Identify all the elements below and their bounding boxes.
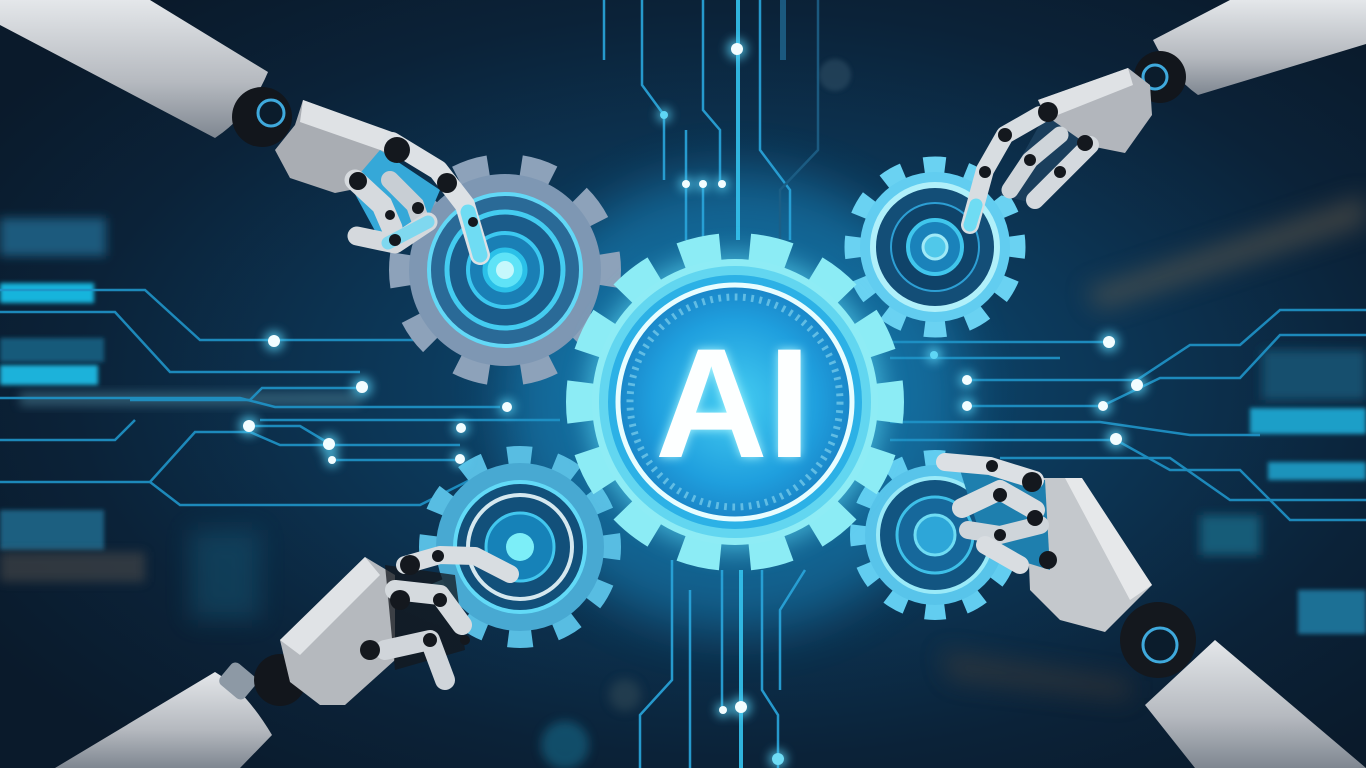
palm	[280, 557, 395, 705]
tick ring	[630, 297, 840, 507]
ring finger	[968, 525, 1040, 535]
index finger	[392, 142, 480, 255]
forearm	[55, 672, 272, 768]
finger backing	[960, 470, 1050, 570]
curled finger	[395, 590, 462, 625]
robot arm: top left	[0, 0, 480, 255]
index finger	[405, 555, 510, 574]
palm	[1038, 68, 1152, 153]
knuckle joints	[360, 550, 470, 660]
robot arm: bottom left	[55, 550, 510, 768]
finger backing	[385, 565, 465, 670]
thumb	[357, 222, 428, 244]
forearm	[1153, 0, 1366, 95]
knuckle joints	[349, 137, 478, 246]
index finger	[945, 462, 1035, 480]
circuit traces right	[890, 310, 1366, 520]
middle finger	[390, 180, 422, 225]
finger backing	[1000, 115, 1095, 205]
AI glow: AI	[655, 317, 811, 491]
gear teeth	[580, 247, 890, 557]
gear: top left	[400, 165, 610, 375]
wrist joint	[254, 654, 306, 706]
forearm	[0, 0, 268, 138]
palm	[275, 100, 392, 193]
gear body	[592, 259, 878, 545]
glowing circuit nodes	[239, 39, 1147, 768]
wrist joint	[232, 87, 292, 147]
gear glow	[585, 252, 885, 552]
circuit traces top	[604, 0, 818, 240]
middle finger	[962, 490, 1035, 510]
AI label: AI	[655, 317, 811, 491]
lower finger	[985, 545, 1020, 565]
circuit traces left	[0, 290, 560, 505]
wrist joint	[1134, 51, 1186, 103]
wrist joint	[1120, 602, 1196, 678]
central AI gear	[580, 247, 890, 557]
white ring	[618, 285, 852, 519]
middle finger	[1010, 135, 1060, 190]
finger backing	[350, 150, 440, 240]
robot arm: top right	[970, 0, 1366, 225]
robot arm: bottom right	[945, 460, 1366, 768]
knuckle joints	[986, 460, 1057, 569]
index finger	[970, 115, 1040, 225]
circuit traces bottom	[640, 560, 805, 768]
gear: bottom left	[428, 455, 612, 639]
forearm	[1145, 640, 1366, 768]
ring finger	[355, 180, 392, 228]
knuckle joints	[979, 102, 1093, 178]
palm	[1028, 478, 1152, 632]
ring finger	[1035, 145, 1090, 200]
lower finger	[385, 640, 445, 680]
gear: bottom right	[858, 458, 1012, 612]
gear: top right	[853, 165, 1017, 329]
